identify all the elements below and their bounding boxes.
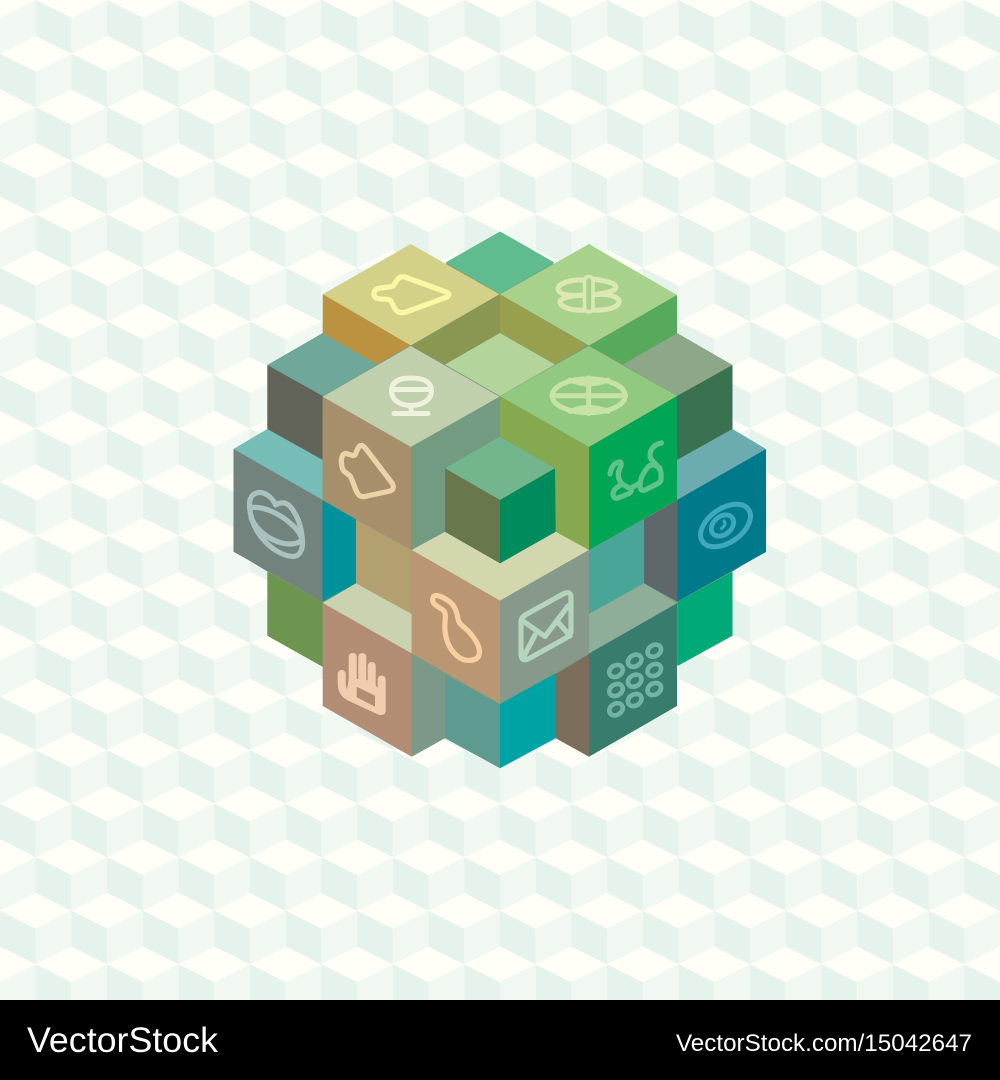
block: dots keypad block [556,583,677,757]
icon: glasses [610,443,662,498]
watermark: brand name: VectorStock [27,1020,218,1060]
icon: lips [249,492,303,556]
watermark bar [0,1000,1000,1080]
block: lower centre teal [412,654,556,768]
icon: globe [552,378,626,414]
block: lower left green [267,572,322,667]
block: top yellow with arrow icon [323,244,500,364]
icon: spiral eye [693,496,758,555]
block: hand icon block [323,583,412,757]
block: lower right green [678,572,732,666]
icon: hand palm window [357,687,375,707]
icon: drumstick [433,595,479,660]
block: centre light green top [445,333,555,396]
icon: arrow on tan face [341,445,393,497]
block: blue right with eye icon [677,429,766,602]
icon: keypad of nine dots [607,642,663,718]
icon: arrow on yellow top [374,277,449,313]
icon: envelope [521,593,571,660]
block: blue-grey left with lips icon [234,429,323,602]
block: back top green [446,232,554,294]
icon: hand [342,657,386,712]
isometric cube cluster [234,232,766,768]
block: small front cube [445,437,556,563]
watermark: image url: VectorStock.com/15042647 [676,1030,972,1057]
icon: money symbol [558,276,619,312]
block: sage and tan with cup and arrow icons [322,346,500,550]
block: green with globe and glasses icons [500,346,677,550]
block: far right grey green [623,333,732,460]
block: far left teal and charcoal [267,333,377,460]
block: front centre with drumstick and envelope icons [412,532,589,704]
icon: cup [392,378,432,414]
block: teal and ochre recess left [322,500,412,614]
block: teal and grey recess right [589,500,678,614]
block: top green with money icon [500,244,677,364]
